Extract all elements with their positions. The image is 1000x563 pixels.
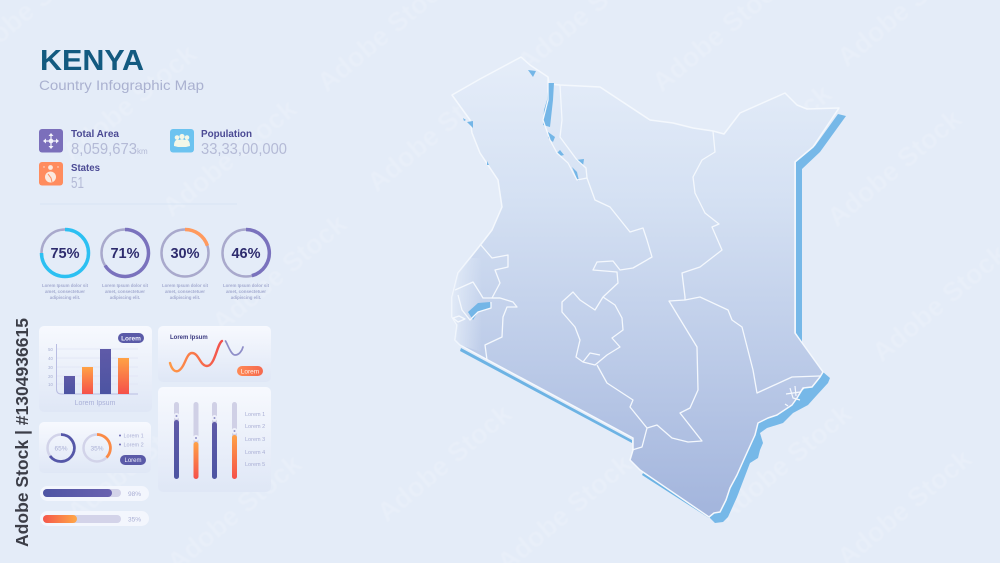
coast depth: east [796, 114, 846, 342]
watermark pattern: Adobe Stock [61, 398, 208, 528]
panel: wave chart card [158, 326, 271, 382]
bar chart: 10 [48, 382, 53, 387]
icon: pin [39, 162, 63, 186]
slider labels: Lorem 5 [245, 462, 265, 468]
stat: population [170, 129, 287, 158]
bar chart: 40 [48, 356, 53, 361]
panel: donuts card [39, 422, 151, 473]
wave line [170, 341, 243, 371]
panel: sliders card [158, 387, 271, 492]
donut stat 46%: Lorem Ipsum dolor sit [223, 283, 270, 288]
donut 35%: 35% [90, 446, 104, 452]
donut stat 30%: Lorem Ipsum dolor sit [162, 283, 209, 288]
icon: people [170, 129, 194, 152]
panel: wave chart card: Lorem Ipsum [170, 335, 208, 341]
stat: states [39, 162, 100, 192]
stat: total area: 8,059,673 [71, 141, 137, 158]
donut stat 30%: adipiscing elit. [170, 295, 200, 300]
map of Kenya [452, 57, 846, 523]
donut stat 30%: 30% [170, 246, 200, 262]
donut stat 75%: Lorem Ipsum dolor sit [42, 283, 89, 288]
stat: total area: Total Area [71, 129, 119, 140]
progress bar 35%: 35% [128, 516, 141, 524]
button: Lorem [124, 458, 142, 464]
button: Lorem [241, 368, 259, 376]
donut stat 75%: 75% [50, 246, 80, 262]
donut stat 46% [222, 230, 270, 300]
panel: bar chart card: Lorem Ipsum [75, 400, 116, 407]
donut stat 30%: amet, consectetuer [165, 289, 205, 294]
watermark pattern: Adobe Stock [156, 93, 303, 223]
watermark pattern: Adobe Stock [361, 68, 508, 198]
slider labels [245, 412, 265, 468]
watermark pattern: Adobe Stock [651, 268, 798, 398]
donut stat 46%: 46% [231, 246, 261, 262]
slider labels: Lorem 4 [245, 450, 265, 456]
legend: Lorem 1 [124, 434, 144, 440]
donut stat 75%: amet, consectetuer [45, 289, 85, 294]
bar chart: 20 [48, 374, 53, 379]
border depth: south [642, 473, 709, 518]
small lakes [463, 70, 584, 181]
slider 1 [174, 402, 180, 479]
watermark pattern: Adobe Stock [206, 208, 353, 338]
donut stat 71%: adipiscing elit. [110, 295, 140, 300]
stat: total area: km [137, 147, 148, 156]
slider 4 [232, 402, 238, 479]
bar chart [48, 344, 138, 394]
donut stat 71%: Lorem Ipsum dolor sit [102, 283, 149, 288]
donut stat 71% [102, 230, 149, 300]
watermark pattern: Adobe Stock [56, 38, 203, 168]
stat: total area [39, 129, 148, 158]
icon: arrows [39, 129, 63, 152]
lake turkana [543, 83, 554, 127]
watermark pattern: Adobe Stock [711, 398, 858, 528]
watermark pattern: Adobe Stock [691, 78, 838, 208]
mombasa island detail [785, 386, 804, 406]
panel: bar chart card [39, 326, 152, 412]
west fade [452, 258, 482, 352]
progress bar 98% [40, 486, 149, 501]
watermark pattern: Adobe Stock [371, 398, 518, 528]
border depth: south west [460, 348, 632, 443]
progress bar 35% [40, 511, 149, 526]
slider labels: Lorem 2 [245, 424, 265, 430]
button: Lorem [121, 336, 141, 342]
donut 65%: 65% [54, 446, 68, 452]
progress bar 98%: 98% [128, 491, 141, 498]
stat: population: 33,33,00,000 [201, 141, 287, 158]
watermark pattern: Adobe Stock [821, 103, 968, 233]
slider 2 [193, 402, 199, 479]
donut stat 30% [162, 229, 209, 300]
bar chart: 50 [48, 347, 53, 352]
country shape [452, 57, 839, 517]
slider labels: Lorem 1 [245, 412, 265, 418]
donut stat 75% [41, 230, 89, 300]
donut stat 46%: adipiscing elit. [231, 295, 261, 300]
donut stat 71%: 71% [110, 246, 140, 262]
title: KENYA [40, 45, 144, 77]
subtitle: Country Infographic Map [39, 77, 204, 93]
lake victoria [468, 302, 491, 320]
slider labels: Lorem 3 [245, 437, 265, 443]
bar chart: 30 [48, 365, 53, 370]
donut stat 75%: adipiscing elit. [50, 295, 80, 300]
stock id side label: Adobe Stock | #1304936615 [12, 318, 32, 547]
stat: states: States [71, 163, 100, 174]
legend [119, 434, 144, 448]
donut stat 46%: amet, consectetuer [226, 289, 266, 294]
coast depth: south east [709, 372, 830, 523]
legend: Lorem 2 [124, 442, 144, 448]
watermark pattern: Adobe Stock [491, 108, 638, 238]
county borders [453, 77, 820, 450]
stat: population: Population [201, 129, 252, 140]
donut stat 71%: amet, consectetuer [105, 289, 145, 294]
watermark pattern: Adobe Stock [531, 228, 678, 358]
stat: states: 51 [71, 175, 84, 192]
slider 3 [212, 402, 218, 479]
